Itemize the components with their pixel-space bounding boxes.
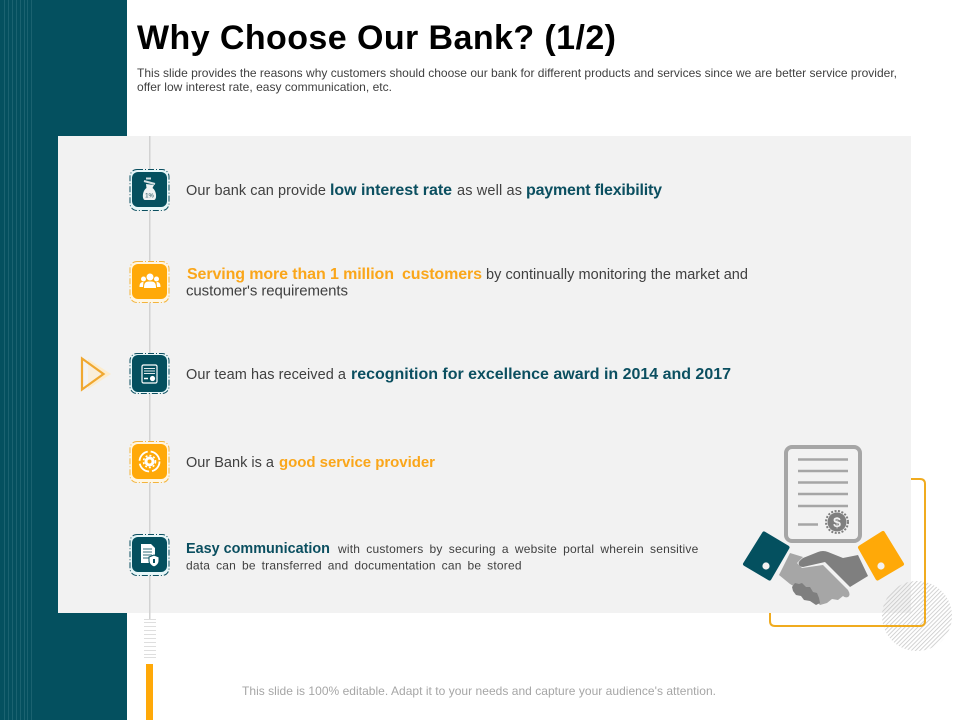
text: item 1 [186, 182, 662, 199]
icon: gear cycle [130, 442, 169, 482]
icon: money bag [130, 170, 169, 210]
text: item 3: recognition for excellence award in 2014 and 2017 [351, 366, 731, 383]
main grey panel [58, 136, 911, 613]
text: item 2: Serving more than 1 million [187, 266, 394, 283]
item 5: easy communication [130, 534, 699, 576]
right cuff [860, 533, 902, 578]
text: item 2 [186, 266, 748, 300]
icon: money bag: 1% [145, 194, 155, 200]
footer note: This slide is 100% editable. Adapt it to your needs and capture your audience's attention. [242, 684, 716, 698]
left cuff [745, 534, 788, 578]
text: item 4: Our Bank is a [186, 455, 275, 471]
light hand [779, 553, 850, 605]
hatched circle [882, 581, 952, 651]
item 4: service provider [130, 442, 435, 482]
text: item 5: with customers by securing a website portal wherein sensitive [337, 542, 699, 556]
text: item 1: as well as [457, 183, 522, 199]
dark hand [798, 551, 868, 587]
subtitle: offer low interest rate, easy communication, etc. [137, 80, 392, 94]
title: Why Choose Our Bank? (1/2) [137, 19, 616, 57]
text: item 1: low interest rate [330, 182, 452, 199]
illustration: handshake and contract [745, 447, 902, 605]
contract document: $ [833, 514, 841, 530]
item 3: award [130, 354, 731, 394]
icon: people [130, 262, 169, 302]
text: item 4 [186, 454, 435, 471]
contract document [786, 447, 860, 541]
text: item 3 [186, 366, 731, 383]
item 2: customers [130, 262, 748, 302]
text: item 1: payment flexibility [526, 182, 662, 199]
text: item 5: Easy communication [186, 541, 330, 557]
text: item 3: Our team has received a [186, 367, 347, 383]
handshake [779, 551, 868, 605]
knuckles [792, 583, 820, 605]
text: item 1: Our bank can provide [186, 183, 326, 199]
subtitle: This slide provides the reasons why customers should choose our bank for different products and services since we are better service provider, [137, 66, 897, 80]
text: item 2: by continually monitoring the market and [486, 267, 748, 283]
subtitle [137, 66, 897, 94]
text: item 4: good service provider [279, 454, 435, 471]
text: item 5 [186, 541, 699, 572]
text: item 2: customers [402, 266, 482, 283]
item 1: low interest rate [130, 170, 662, 210]
text: item 2: customer's requirements [186, 282, 348, 300]
left sidebar [0, 0, 127, 720]
decorative orange frame [770, 479, 925, 626]
timeline [144, 136, 156, 720]
icon: certificate [130, 354, 169, 394]
pointer triangle [82, 358, 111, 390]
text: item 5: data can be transferred and documentation can be stored [186, 558, 522, 572]
icon: secure document [130, 534, 169, 576]
